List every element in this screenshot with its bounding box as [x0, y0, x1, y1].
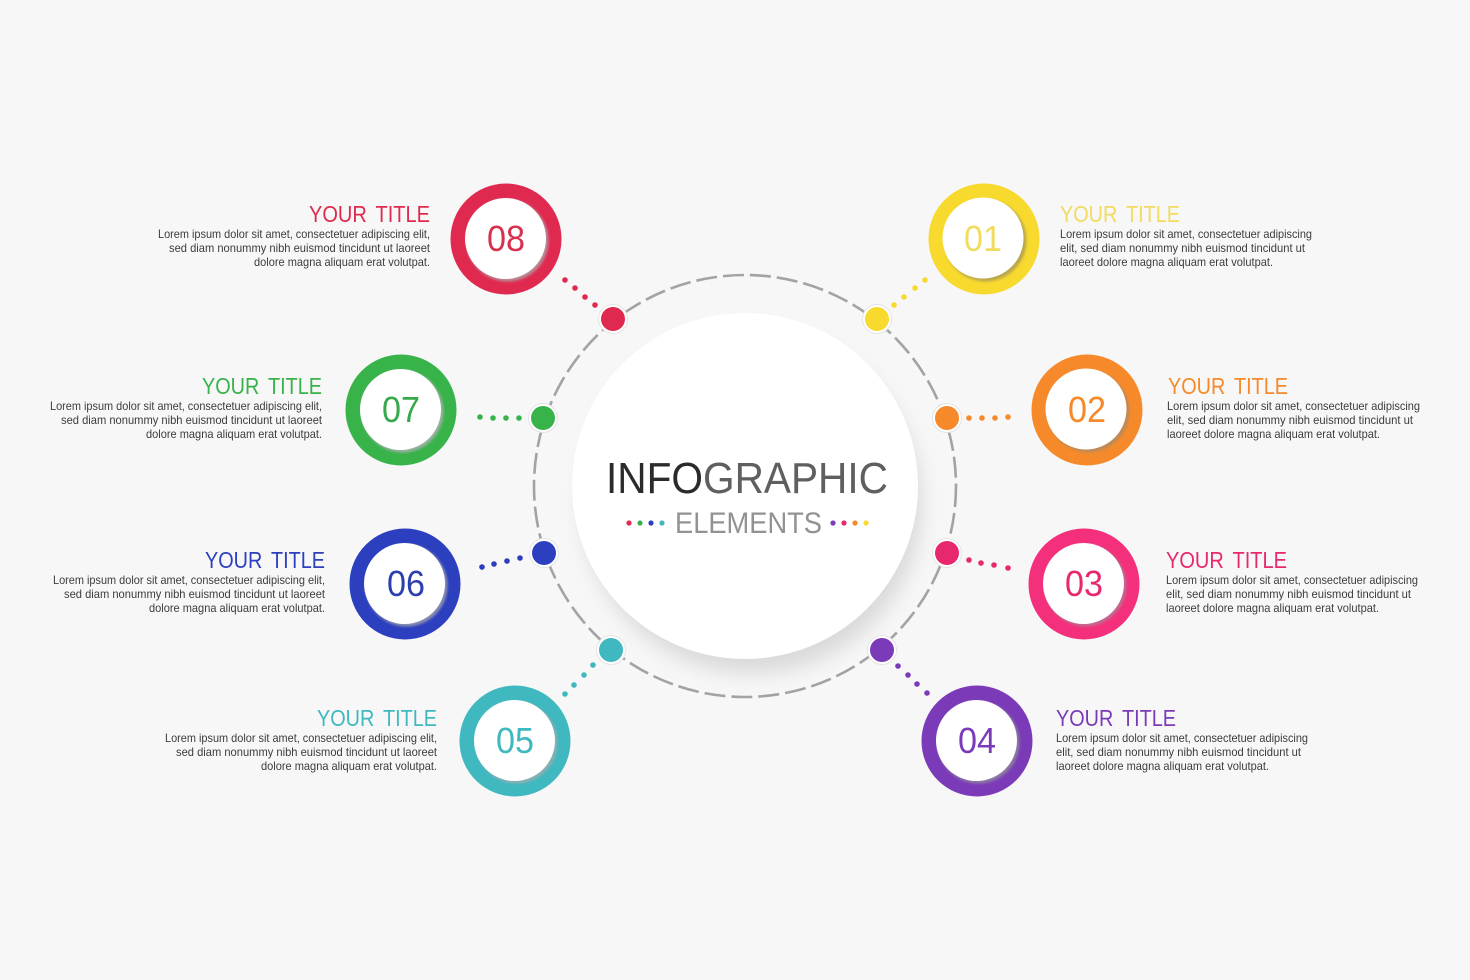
- text 01: Lorem ipsum dolor sit amet, consectetuer adipiscing: [1060, 227, 1312, 241]
- connector dots 04: [895, 663, 930, 696]
- number 02: 02: [1068, 389, 1106, 430]
- item 03: [932, 528, 1418, 640]
- number 01: 01: [964, 218, 1002, 259]
- text 04: elit, sed diam nonummy nibh euismod tincidunt ut: [1056, 745, 1302, 759]
- connector dots 05: [562, 662, 596, 697]
- node 01: [862, 304, 892, 334]
- decorative dots right of subheading: [830, 520, 869, 526]
- text 06: dolore magna aliquam erat volutpat.: [149, 601, 325, 615]
- ring 08: [450, 184, 562, 294]
- connector dots 03: [966, 557, 1011, 571]
- ring 06: [350, 528, 460, 640]
- title 05: YOUR TITLE: [317, 705, 437, 731]
- item 06: [53, 528, 558, 640]
- node 06: [530, 538, 558, 568]
- text 02: Lorem ipsum dolor sit amet, consectetuer adipiscing: [1167, 399, 1420, 413]
- text 02: [1167, 399, 1420, 441]
- text 08: [158, 227, 431, 269]
- text 01: elit, sed diam nonummy nibh euismod tincidunt ut: [1060, 241, 1306, 255]
- connector dots 06: [479, 555, 523, 570]
- connector dots 07: [477, 414, 522, 421]
- text 03: [1166, 573, 1418, 615]
- text 04: Lorem ipsum dolor sit amet, consectetuer adipiscing: [1056, 731, 1308, 745]
- ring 01: [928, 184, 1040, 294]
- ring 07: [346, 354, 456, 466]
- text 05: Lorem ipsum dolor sit amet, consectetuer adipiscing elit,: [165, 731, 437, 745]
- ring 03: [1028, 528, 1140, 640]
- text 02: elit, sed diam nonummy nibh euismod tincidunt ut: [1167, 413, 1414, 427]
- text 06: sed diam nonummy nibh euismod tincidunt ut laoreet: [64, 587, 326, 601]
- number 08: 08: [487, 218, 525, 259]
- ring 04: [922, 686, 1032, 796]
- text 01: laoreet dolore magna aliquam erat volutpat.: [1060, 255, 1273, 269]
- text 03: laoreet dolore magna aliquam erat volutpat.: [1166, 601, 1379, 615]
- title 01: YOUR TITLE: [1060, 201, 1180, 227]
- item 08: [158, 184, 628, 334]
- title 04: YOUR TITLE: [1056, 705, 1176, 731]
- title 02: YOUR TITLE: [1168, 373, 1288, 399]
- item 02: [932, 354, 1420, 466]
- item 01: [862, 184, 1312, 334]
- number 03: 03: [1065, 563, 1103, 604]
- central circle: [572, 313, 922, 674]
- item 04: [868, 636, 1308, 796]
- title 07: YOUR TITLE: [202, 373, 322, 399]
- text 03: Lorem ipsum dolor sit amet, consectetuer adipiscing: [1166, 573, 1418, 587]
- ring 02: [1032, 354, 1142, 466]
- title 08: YOUR TITLE: [309, 201, 430, 227]
- node 05: [596, 636, 626, 664]
- decorative dots left of subheading: [626, 520, 665, 526]
- text 05: dolore magna aliquam erat volutpat.: [261, 759, 437, 773]
- ring 05: [460, 686, 570, 796]
- text 07: [50, 399, 323, 441]
- node 07: [528, 404, 558, 432]
- text 04: laoreet dolore magna aliquam erat volutpat.: [1056, 759, 1269, 773]
- node 04: [868, 636, 896, 664]
- number 04: 04: [958, 720, 996, 761]
- node 08: [598, 304, 628, 334]
- node 02: [932, 404, 962, 432]
- connector dots 08: [562, 277, 598, 308]
- text 02: laoreet dolore magna aliquam erat volutpat.: [1167, 427, 1380, 441]
- title 03: YOUR TITLE: [1166, 547, 1287, 573]
- text 07: sed diam nonummy nibh euismod tincidunt ut laoreet: [61, 413, 323, 427]
- text 08: sed diam nonummy nibh euismod tincidunt ut laoreet: [169, 241, 431, 255]
- text 05: sed diam nonummy nibh euismod tincidunt ut laoreet: [176, 745, 438, 759]
- dashed orbit ring: [534, 275, 956, 697]
- text 01: [1060, 227, 1312, 269]
- text 06: [53, 573, 326, 615]
- connector dots 01: [891, 277, 928, 308]
- title 06: YOUR TITLE: [205, 547, 325, 573]
- text 08: dolore magna aliquam erat volutpat.: [254, 255, 430, 269]
- text 07: dolore magna aliquam erat volutpat.: [146, 427, 322, 441]
- number 05: 05: [496, 720, 534, 761]
- item 05: [165, 636, 626, 796]
- subheading: elements: ELEMENTS: [675, 507, 822, 540]
- node 03: [932, 538, 962, 568]
- number 07: 07: [382, 389, 420, 430]
- text 05: [165, 731, 438, 773]
- text 07: Lorem ipsum dolor sit amet, consectetuer adipiscing elit,: [50, 399, 322, 413]
- heading: infographic: INFOGRAPHIC: [606, 454, 888, 503]
- connector dots 02: [966, 414, 1011, 421]
- text 06: Lorem ipsum dolor sit amet, consectetuer adipiscing elit,: [53, 573, 325, 587]
- item 07: [50, 354, 558, 466]
- text 04: [1056, 731, 1308, 773]
- text 08: Lorem ipsum dolor sit amet, consectetuer adipiscing elit,: [158, 227, 430, 241]
- text 03: elit, sed diam nonummy nibh euismod tincidunt ut: [1166, 587, 1412, 601]
- number 06: 06: [387, 563, 425, 604]
